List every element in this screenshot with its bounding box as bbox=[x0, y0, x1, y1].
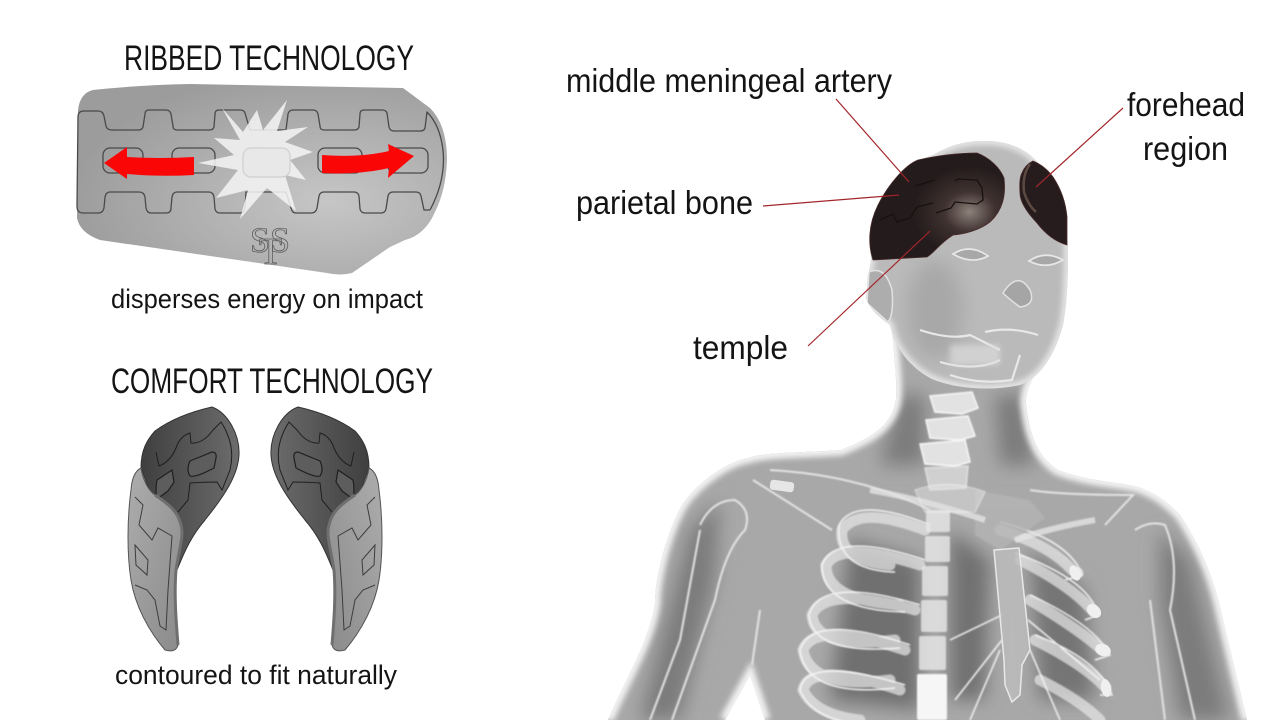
silhouette glow bbox=[608, 327, 1247, 720]
rib tips bbox=[1067, 564, 1113, 698]
clavicle and upper sternum bbox=[976, 493, 1043, 548]
collar bars bbox=[870, 490, 1095, 540]
arm bones bbox=[650, 470, 1195, 720]
ear bbox=[867, 270, 892, 322]
inner grooves bbox=[156, 422, 232, 512]
label: middle meningeal artery: middle meningeal artery bbox=[566, 62, 892, 99]
translucent anatomical figure bbox=[600, 135, 1260, 720]
right pad bbox=[271, 407, 382, 651]
sternum bbox=[994, 548, 1030, 702]
centre slot bbox=[243, 148, 290, 177]
caption: disperses energy: disperses energy on impact bbox=[111, 284, 423, 314]
helmet pad: parietal bbox=[870, 153, 1005, 260]
heading: ribbed technology: RIBBED TECHNOLOGY bbox=[124, 39, 414, 78]
leader line: temple bbox=[808, 231, 930, 346]
left pad bbox=[128, 407, 239, 651]
eyes bbox=[953, 249, 1063, 265]
leader line: parietal bone bbox=[763, 195, 899, 206]
cervical spine bbox=[915, 392, 985, 512]
rib outlines bbox=[800, 510, 1112, 720]
torso and arms bbox=[600, 320, 1260, 720]
pad ribs bbox=[880, 179, 983, 222]
logo: S bbox=[250, 220, 270, 260]
head bbox=[866, 141, 1068, 388]
inner side slot bbox=[156, 470, 174, 499]
inner slot bbox=[188, 452, 216, 476]
arrow: right bbox=[322, 144, 414, 178]
forehead rim bbox=[1024, 164, 1036, 212]
label: parietal bone: parietal bone bbox=[576, 184, 753, 221]
label: forehead region: forehead bbox=[1127, 86, 1245, 123]
rib grooves bbox=[77, 110, 443, 213]
inner shell bbox=[141, 407, 239, 570]
logo bbox=[250, 220, 290, 273]
outer shell bbox=[128, 468, 182, 651]
logo: T bbox=[259, 231, 282, 273]
dark arm and chest shading bbox=[640, 395, 1230, 720]
rib cage bbox=[803, 518, 1106, 720]
spine bbox=[917, 510, 950, 720]
mouth and jaw bbox=[920, 330, 1038, 382]
ribbed plate illustration bbox=[77, 84, 447, 274]
heading: comfort technology: COMFORT TECHNOLOGY bbox=[111, 362, 433, 401]
label: forehead region: region bbox=[1143, 130, 1228, 167]
face shading bbox=[907, 260, 963, 360]
helmet pad: forehead bbox=[1020, 161, 1067, 245]
label: temple: temple bbox=[693, 329, 788, 366]
logo: S bbox=[270, 220, 290, 260]
leader line: middle meningeal artery bbox=[836, 99, 909, 182]
collar joint bbox=[769, 479, 795, 493]
comfort pads illustration bbox=[128, 407, 382, 651]
impact starburst bbox=[198, 100, 313, 219]
head glow bbox=[866, 141, 1068, 389]
teeth bbox=[950, 345, 1000, 365]
edge band bbox=[155, 495, 182, 645]
arrow: left bbox=[104, 147, 194, 179]
leader line: forehead region bbox=[1036, 108, 1123, 187]
nose bbox=[1003, 281, 1032, 307]
caption: contoured: contoured to fit naturally bbox=[115, 660, 397, 690]
outer grooves bbox=[135, 497, 172, 630]
plate body bbox=[77, 84, 447, 274]
